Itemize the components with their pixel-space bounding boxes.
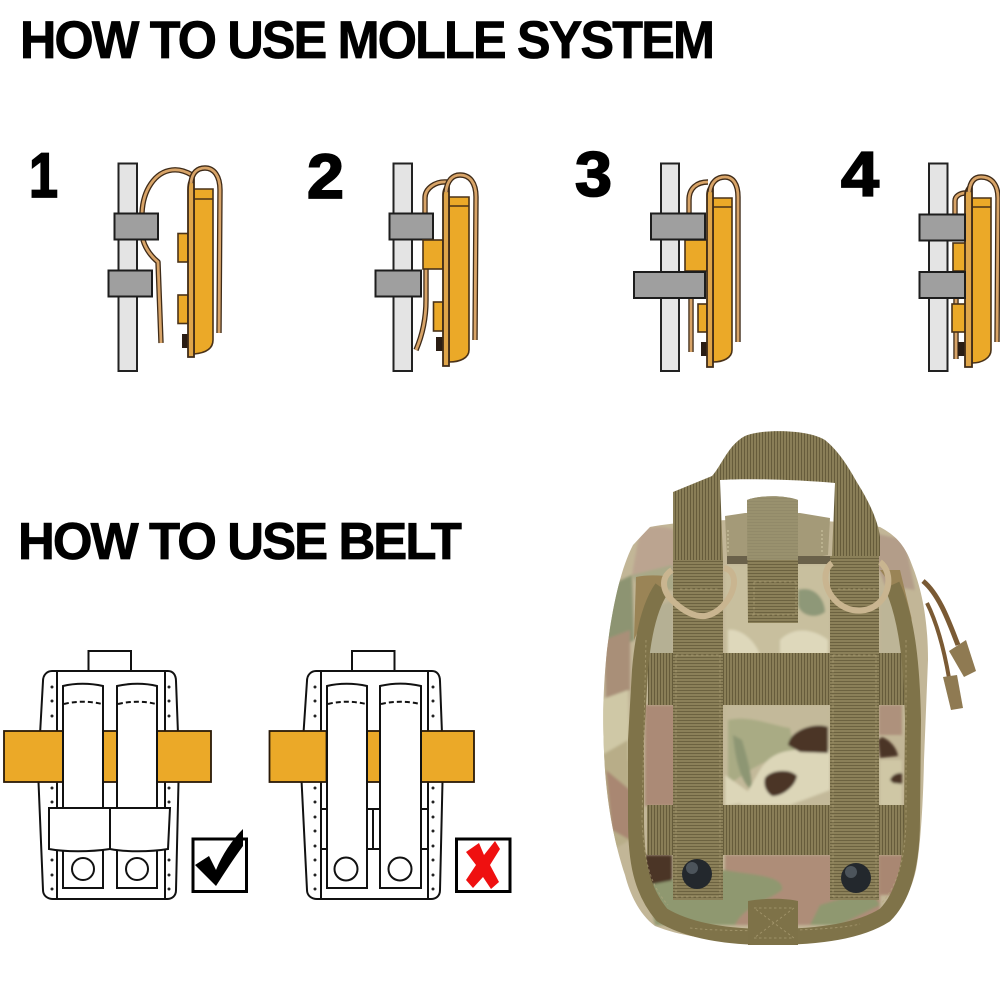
- strap: [689, 182, 708, 352]
- webbing straps: [673, 556, 879, 900]
- belt: [270, 731, 474, 782]
- binding stitching: [642, 640, 906, 931]
- step 2 diagram: [307, 142, 476, 371]
- molle straps: [327, 684, 421, 888]
- webbing bands: [920, 214, 965, 298]
- bottom tab: [748, 899, 798, 945]
- heading: how to use belt: HOW TO USE BELT: [18, 512, 462, 570]
- binding trim: [636, 585, 913, 937]
- pouch body with camouflage: [600, 510, 935, 950]
- cross box: [456, 839, 510, 892]
- d-rings: [664, 562, 888, 616]
- top tab: [88, 651, 131, 671]
- step number 2: 2: [307, 142, 344, 212]
- zipper pulls: [923, 581, 976, 710]
- pouch side view: [178, 168, 220, 357]
- pole: [394, 164, 412, 371]
- horizontal webbing: [647, 653, 908, 855]
- black tab: [958, 342, 965, 356]
- snap buttons: [682, 859, 871, 893]
- pouch side view: [952, 177, 998, 367]
- belt diagram: correct: [4, 651, 246, 899]
- pouch side view: [685, 177, 738, 367]
- step 1 diagram: [29, 141, 220, 371]
- strap: [955, 193, 966, 359]
- side seams: [321, 671, 428, 899]
- molle straps: [63, 684, 157, 888]
- belt loop panels: [49, 808, 170, 851]
- strap: [142, 170, 192, 343]
- product photo: camouflage pouch: [600, 431, 976, 950]
- webbing bands: [634, 214, 705, 298]
- stitch dots: [314, 686, 434, 890]
- check box: [193, 829, 246, 892]
- pouch outline: [38, 671, 179, 899]
- title: how to use molle system: HOW TO USE MOLLE SYSTEM: [20, 10, 715, 69]
- snap circles: [72, 858, 148, 880]
- webbing bands: [376, 214, 433, 296]
- stitch dots: [50, 686, 170, 890]
- webbing bands: [108, 214, 158, 296]
- step 4 diagram: [841, 140, 998, 371]
- step number 4: 4: [841, 140, 879, 210]
- strap: [416, 182, 447, 350]
- pole: [661, 164, 679, 371]
- trim corner patches: [634, 570, 912, 640]
- step number 3: 3: [575, 140, 612, 210]
- side seams: [57, 671, 165, 899]
- pole: [118, 164, 137, 371]
- pole: [929, 164, 948, 371]
- top closure flap: [725, 513, 830, 564]
- step 3 diagram: [575, 140, 738, 371]
- belt: [4, 731, 211, 782]
- carry handle: [673, 431, 880, 560]
- top tab: [352, 651, 394, 671]
- step number 1: 1: [29, 141, 58, 211]
- pouch outline: [301, 671, 443, 899]
- snap circles: [334, 858, 412, 880]
- pouch side view: [423, 175, 476, 366]
- belt diagram: incorrect: [270, 651, 510, 899]
- center tab: [747, 496, 798, 623]
